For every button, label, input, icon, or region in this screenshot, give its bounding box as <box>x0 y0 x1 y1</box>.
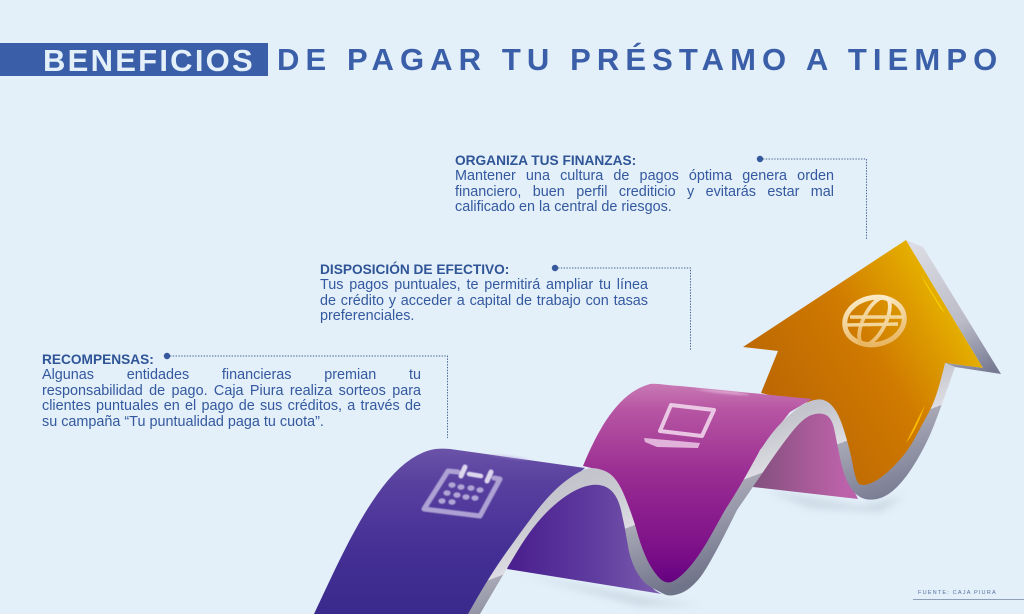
calendar rings and bar <box>461 467 491 481</box>
magenta ribbon face <box>583 384 812 590</box>
arrow head and shaft <box>743 240 1001 495</box>
source text: FUENTE: CAJA PIURA <box>918 590 997 596</box>
body: organiza tus finanzas: Mantener una cultura de pagos óptima genera orden <box>455 168 834 184</box>
heading: disposición de efectivo: DISPOSICIÓN DE EFECTIVO: <box>320 262 509 277</box>
globe icon <box>840 292 909 350</box>
body: disposición de efectivo <box>320 277 648 324</box>
magenta grey edge band <box>725 363 955 510</box>
arrow yellow highlight <box>921 275 945 313</box>
body: organiza tus finanzas: calificado en la central de riesgos. <box>455 199 672 215</box>
text block: organiza tus finanzas <box>455 153 834 215</box>
body: recompensas: responsabilidad de pago. Caja Piura realiza sorteos para <box>42 382 421 398</box>
text block: recompensas <box>42 352 421 430</box>
purple ribbon inner side <box>507 475 662 594</box>
magenta ribbon inner side <box>745 405 858 499</box>
dotted connector: disposición de efectivo <box>552 265 690 351</box>
arrow lower yellow highlight <box>906 405 925 443</box>
body: recompensas: Algunas entidades financieras premian tu <box>42 367 421 383</box>
body: disposición de efectivo: preferenciales. <box>320 308 414 324</box>
body: recompensas <box>42 367 421 430</box>
calendar dots <box>438 482 484 505</box>
text block: disposición de efectivo <box>320 262 648 324</box>
body: recompensas: su campaña “Tu puntualidad paga tu cuota”. <box>42 414 324 430</box>
purple ribbon sheen <box>488 454 530 460</box>
arrow tip edge <box>906 240 1001 374</box>
purple grey edge band <box>468 468 737 614</box>
ground shadows <box>520 490 905 606</box>
heading: recompensas: RECOMPENSAS: <box>42 352 154 367</box>
laptop icon <box>644 405 714 448</box>
dotted connector: organiza tus finanzas <box>757 156 866 240</box>
title bar: blue band <box>0 43 268 76</box>
title: de pagar tu préstamo a tiempo: DE PAGAR TU PRÉSTAMO A TIEMPO <box>277 42 1003 77</box>
magenta ribbon sheen <box>694 389 750 395</box>
dotted connector: recompensas <box>164 353 448 438</box>
heading: organiza tus finanzas: ORGANIZA TUS FINANZAS: <box>455 153 636 168</box>
title: beneficios: BENEFICIOS <box>43 42 255 78</box>
calendar icon <box>424 467 500 516</box>
body: recompensas: clientes puntuales en el pago de sus créditos, a través de <box>42 398 421 414</box>
body: disposición de efectivo: Tus pagos puntuales, te permitirá ampliar tu línea <box>320 277 648 293</box>
purple ribbon face <box>314 449 585 614</box>
body: organiza tus finanzas: financiero, buen perfil crediticio y evitarás estar mal <box>455 184 834 200</box>
body: disposición de efectivo: de crédito y acceder a capital de trabajo con tasas <box>320 292 648 308</box>
body: organiza tus finanzas <box>455 168 834 215</box>
source credit <box>913 588 1024 600</box>
